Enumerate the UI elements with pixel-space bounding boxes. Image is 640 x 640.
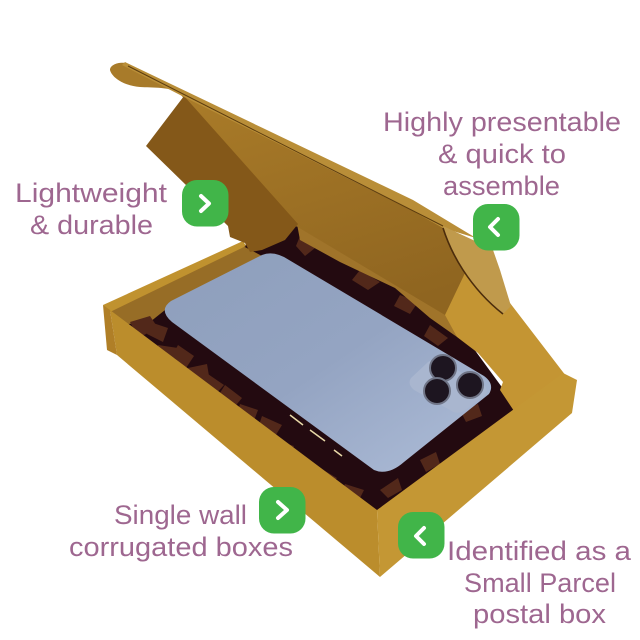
callout: single wall corrugated boxes: Single wall [114, 500, 247, 530]
camera lenses [430, 355, 456, 381]
callout: identified as small parcel postal box: postal box [473, 599, 607, 629]
right side flap [445, 273, 566, 414]
callout: highly presentable [383, 107, 621, 201]
phone body [165, 253, 491, 472]
back wall strip [297, 224, 457, 337]
left side flap [146, 96, 298, 252]
callout: single wall corrugated boxes [69, 500, 293, 562]
back-left wall top edge [103, 241, 246, 312]
callout: lightweight and durable: Lightweight [15, 178, 168, 208]
phone camera module [410, 355, 487, 413]
back-left inner wall [110, 246, 262, 324]
callout: identified as small parcel postal box: Small Parcel [464, 568, 616, 598]
callout: highly presentable: & quick to [438, 139, 566, 169]
callout: lightweight and durable: & durable [30, 210, 153, 240]
tuck flap [443, 226, 511, 314]
illustration: open cardboard box with phone [103, 62, 577, 577]
left corner tab [103, 305, 117, 355]
box interior with dark shredded paper [112, 226, 520, 511]
callout: lightweight and durable [15, 178, 168, 240]
callout: highly presentable: assemble [443, 171, 560, 201]
open lid inner face [180, 94, 470, 318]
icon: green left arrow, postal box [398, 512, 444, 558]
front wall [110, 310, 380, 577]
icon: green left arrow, presentable [473, 204, 520, 250]
right front wall [377, 373, 577, 577]
shredded paper pieces [130, 236, 482, 502]
icon: green right arrow, lightweight [182, 180, 228, 226]
callout: highly presentable: Highly presentable [383, 107, 621, 137]
lid top edge [122, 62, 476, 238]
phone side edge highlights [290, 415, 342, 456]
callout: single wall corrugated boxes: corrugated boxes [69, 532, 293, 562]
callout: identified as small parcel postal box: Identified as a [447, 536, 632, 566]
lid top tab [110, 63, 186, 95]
callout: identified as small parcel postal box [447, 536, 632, 629]
icon: green right arrow, corrugated [259, 487, 306, 534]
